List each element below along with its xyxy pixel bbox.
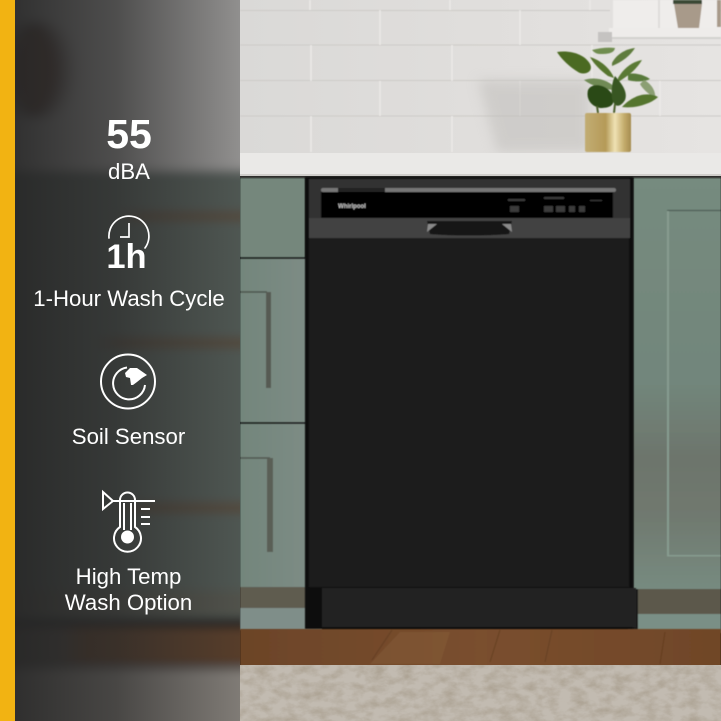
rug (240, 665, 721, 721)
icon: 1-hour clock (106, 216, 149, 276)
icon: high temp thermometer (103, 492, 155, 552)
label: 1-Hour Wash Cycle: 1-Hour Wash Cycle (33, 286, 225, 311)
wall shelf with small pot (598, 0, 721, 42)
kitchen wall: white brick backsplash (240, 0, 721, 153)
left cabinets (240, 178, 322, 630)
label: High Temp Wash Option (65, 564, 192, 615)
kick plate (322, 588, 636, 627)
door handle (427, 221, 512, 236)
stat: 55 dBA (106, 111, 152, 184)
control panel (321, 192, 613, 218)
icon: soil sensor (101, 354, 155, 408)
panel buttons (508, 197, 602, 212)
stat: 55 dBA: 55 (106, 111, 152, 157)
yellow side bar (0, 0, 15, 721)
plant in brass pot (557, 48, 658, 152)
brand label: Whirlpool (338, 204, 366, 210)
wood floor (240, 629, 721, 666)
label: Soil Sensor: Soil Sensor (72, 424, 186, 449)
countertop (240, 153, 721, 178)
frosted side panel with blurred kitchen behind (15, 0, 240, 721)
dishwasher door (309, 238, 629, 587)
label: High Temp Wash Option: Wash Option (65, 590, 192, 615)
top console strip (309, 179, 630, 238)
right cabinet (628, 178, 721, 633)
icon: 1-hour clock: 1h (106, 238, 147, 276)
label: High Temp Wash Option: High Temp (76, 564, 181, 589)
stat: 55 dBA: dBA (108, 159, 150, 184)
dishwasher (305, 177, 636, 629)
